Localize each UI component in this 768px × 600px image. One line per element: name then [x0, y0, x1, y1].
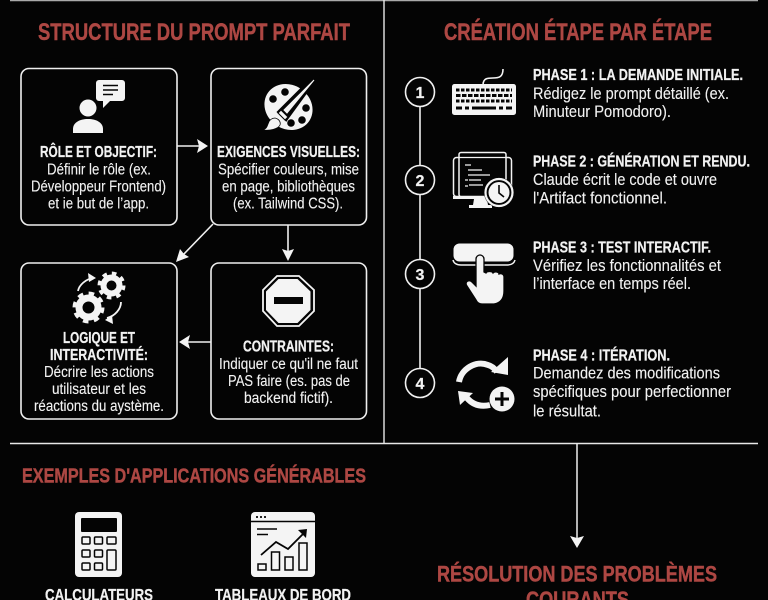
arrow: vers résolution: [570, 443, 584, 548]
panel: contraintes: [211, 263, 366, 419]
text: logique et interactivité: [34, 330, 164, 415]
text: rôle et objectif: Développeur Frontend): [31, 178, 166, 196]
heading: résolution des problèmes courants: RÉSOLUTION DES PROBLÈMES: [437, 562, 717, 586]
step number 4: 4: [416, 376, 425, 393]
icon: dashboard: [251, 512, 315, 577]
icon: keyboard: [452, 69, 516, 115]
text: phase 3: Vérifiez les fonctionnalités et: [533, 256, 721, 275]
panel: rôle et objectif: [21, 68, 177, 225]
heading: structure du prompt parfait: STRUCTURE DU PROMPT PARFAIT: [38, 19, 350, 46]
icon: stop sign: [263, 276, 314, 326]
text: logique et interactivité: INTERACTIVITÉ:: [50, 347, 148, 364]
text: phase 3: PHASE 3 : TEST INTERACTIF.: [533, 240, 711, 256]
text: contraintes: backend fictif).: [244, 390, 333, 407]
text: contraintes: PAS faire (es. pas de: [228, 373, 350, 390]
text: exigences visuelles: (ex. Tailwind CSS).: [233, 196, 343, 212]
text: phase 1: Rédigez le prompt détaillé (ex.: [533, 84, 729, 103]
icon: person with speech bubble: [73, 80, 125, 133]
icon: iteration arrows with plus: [458, 357, 514, 412]
arrow: contraintes vers logique: [179, 335, 211, 349]
text: phase 1: Minuteur Pomodoro).: [533, 102, 671, 121]
text: phase 2: Claude écrit le code et ouvre: [533, 170, 717, 189]
text: exigences visuelles: Spécifier couleurs, mise: [218, 162, 359, 178]
text: phase 1: [533, 67, 743, 121]
step number 1: 1: [416, 85, 425, 102]
timeline: numbered steps: [406, 78, 434, 398]
icon: finger pressing button: [453, 244, 515, 304]
text: phase 2: l'Artifact fonctionnel.: [533, 188, 667, 208]
heading: exemples d'applications: EXEMPLES D'APPLICATIONS GÉNÉRABLES: [22, 464, 366, 488]
step number 2: 2: [416, 173, 425, 190]
text: phase 3: [533, 240, 721, 293]
text: contraintes: Indiquer ce qu'il ne faut: [219, 356, 359, 373]
step number 2: [406, 166, 434, 194]
step number 1: [406, 78, 434, 106]
step number 3: 3: [416, 267, 425, 284]
text: logique et interactivité: LOGIQUE ET: [63, 330, 135, 347]
icon: calculator: [75, 512, 122, 577]
text: phase 4: spécifiques pour perfectionner: [533, 382, 731, 401]
text: phase 3: l’interface en temps réel.: [533, 274, 691, 293]
text: phase 4: [533, 348, 731, 420]
icon: gears and rotation arrows: [74, 273, 124, 324]
text: contraintes: [219, 338, 359, 407]
text: rôle et objectif: RÔLE ET OBJECTIF:: [40, 143, 157, 161]
text: phase 4: Demandez des modifications: [533, 364, 720, 382]
text: phase 2: [533, 154, 750, 208]
arrow: exigences vers contraintes: [282, 225, 294, 261]
arrow: exigences vers logique: [176, 224, 213, 262]
step number 4: [406, 368, 434, 398]
text: exigences visuelles: EXIGENCES VISUELLES:: [217, 144, 360, 161]
text: phase 4: le résultat.: [533, 402, 601, 420]
text: rôle et objectif: [31, 143, 166, 212]
text: logique et interactivité: réactions du aystème.: [34, 398, 164, 415]
panel: exigences visuelles: [211, 68, 366, 225]
text: logique et interactivité: Décrire les actions: [44, 364, 154, 381]
text: exigences visuelles: en page, bibliothèques: [222, 178, 355, 196]
icon: code window and clock: [453, 152, 514, 208]
text: phase 4: PHASE 4 : ITÉRATION.: [533, 348, 670, 364]
text: rôle et objectif: Définir le rôle (ex.: [47, 162, 151, 178]
text: contraintes: CONTRAINTES:: [243, 338, 334, 356]
arrow: rôle vers exigences: [177, 139, 208, 153]
panel: logique et interactivité: [21, 263, 177, 419]
step number 3: [406, 260, 434, 288]
text: logique et interactivité: utilisateur et les: [52, 381, 146, 398]
icon: palette and brush: [255, 74, 322, 139]
text: rôle et objectif: et ie but de l’app.: [48, 196, 149, 212]
text: exigences visuelles: [217, 144, 360, 212]
heading: résolution des problèmes courants: [437, 562, 717, 600]
